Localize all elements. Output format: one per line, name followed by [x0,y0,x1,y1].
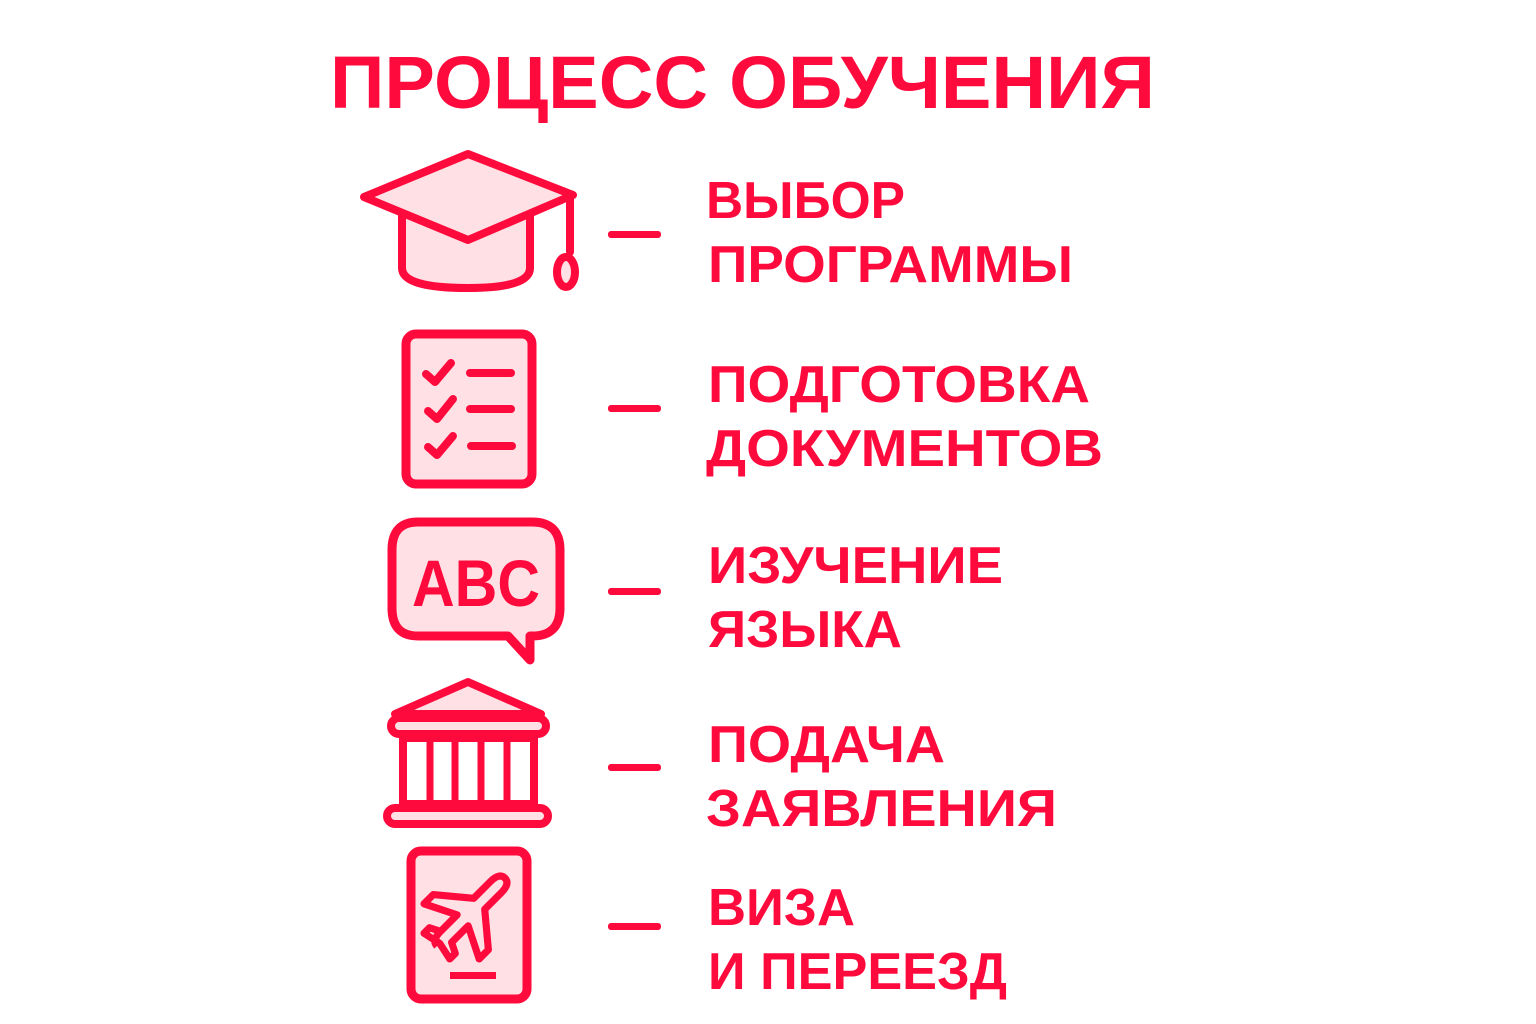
icon: ABC speech bubble [392,522,560,660]
label: step 2: ДОКУМЕНТОВ [706,420,1103,478]
label: step 1: ВЫБОР [706,172,905,230]
label: step 1 [706,172,1073,294]
icon: graduation cap [364,154,575,288]
label: step 3: ИЗУЧЕНИЕ [708,537,1003,595]
icon: ABC speech bubble: ABC [412,546,540,620]
dash 3 [608,588,661,595]
dash 4 [608,764,661,771]
label: step 4: ПОДАЧА [708,716,945,774]
label: step 5: И ПЕРЕЕЗД [708,943,1007,1001]
label: step 2 [706,356,1103,478]
dash 2 [608,405,661,412]
label: step 4: ЗАЯВЛЕНИЯ [706,780,1057,838]
label: step 3 [708,537,1003,659]
label: step 4 [706,716,1057,838]
label: step 2: ПОДГОТОВКА [708,356,1090,414]
icon: visa card with plane [409,850,533,999]
title: ПРОЦЕСС ОБУЧЕНИЯ [330,41,1155,124]
label: step 3: ЯЗЫКА [708,601,902,659]
label: step 1: ПРОГРАММЫ [708,236,1073,294]
label: step 5 [708,879,1007,1001]
icon: university building [387,682,548,824]
dash 1 [608,231,661,238]
label: step 5: ВИЗА [708,879,855,937]
dash 5 [608,923,661,930]
icon: checklist document [406,334,532,484]
